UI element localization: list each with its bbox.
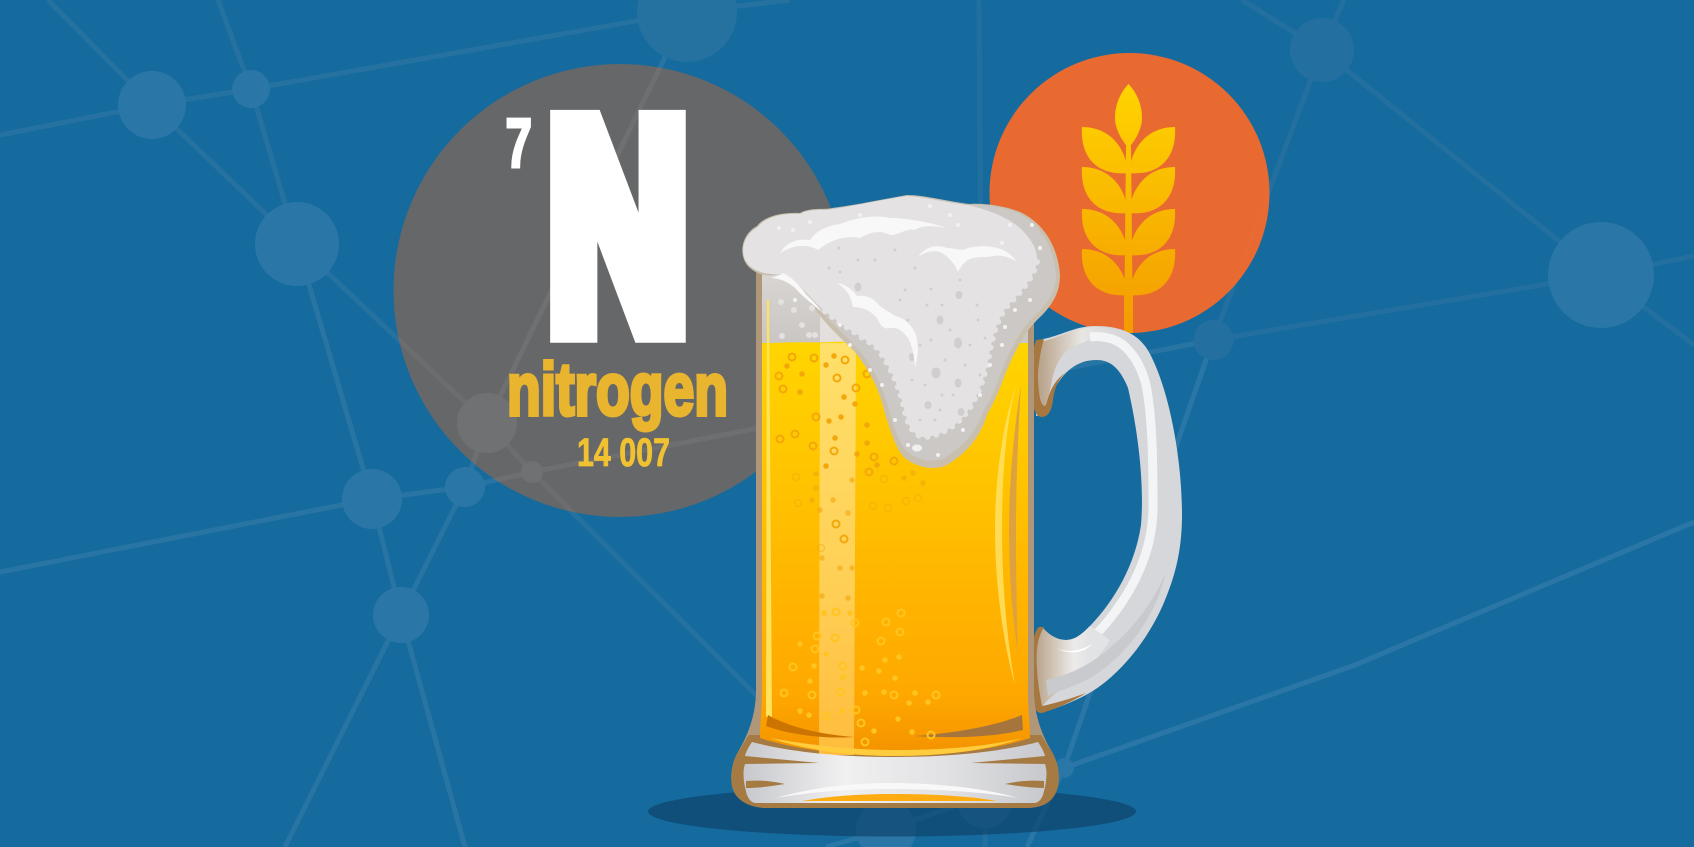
glass base outline [731,735,1059,808]
network seen through disc [457,74,756,483]
foam back rim [742,195,1060,468]
beer [760,343,1030,756]
element symbol: N [549,65,687,388]
beer foam line [762,342,880,348]
atomic weight: 14 007 [577,431,670,475]
lower handle joint [1030,627,1086,713]
foam scalloped lower edge [820,262,1037,437]
bottom crescents [766,715,855,738]
beer bubbles [776,354,898,542]
illustration: beer mug [731,195,1182,808]
foam main body [743,196,1037,437]
left highlight [766,300,772,720]
icon: wheat ear [1082,84,1175,333]
upper handle joint [1031,339,1067,417]
glass above beer [762,270,1028,343]
atomic number: 7 [506,104,532,182]
gray disc [394,64,846,517]
right highlights [995,383,1017,685]
foam bubbles [854,282,964,416]
panel: nitrogen element circle [394,64,831,517]
foam shadow layer [743,196,1056,461]
orange disc [990,53,1270,333]
glass body [731,270,1059,808]
light strip in beer [819,343,856,755]
foam highlights [770,216,1017,367]
mug handle [1030,326,1182,713]
glass base [744,742,1046,803]
panel: wheat circle [990,53,1270,333]
mug shadow [648,786,1136,836]
element name: nitrogen [507,348,728,431]
